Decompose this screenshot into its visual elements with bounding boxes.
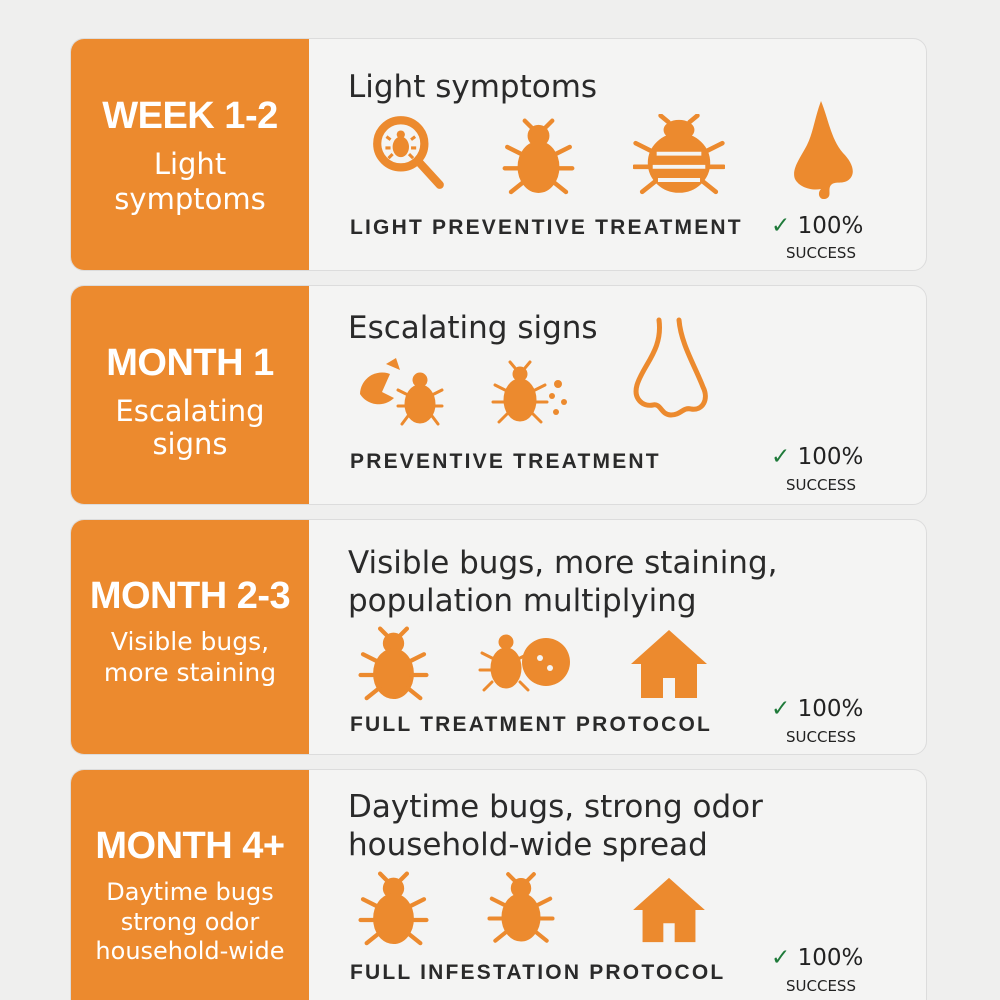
panel: month 1 label bbox=[71, 286, 309, 504]
heading: population multiplying bbox=[348, 583, 697, 619]
heading: Escalating signs bbox=[348, 310, 598, 346]
card: week 1-2 bbox=[70, 38, 927, 271]
label: LIGHT PREVENTIVE TREATMENT bbox=[350, 216, 743, 239]
success: ✓ 100% bbox=[771, 444, 863, 470]
success: ✓ 100% bbox=[771, 213, 863, 239]
icon: bug bbox=[502, 118, 574, 194]
panel: month 2-3 label: more staining bbox=[104, 658, 276, 687]
panel: month 4+ label: MONTH 4+ bbox=[95, 825, 285, 867]
card: month 4+: SUCCESS bbox=[786, 977, 856, 995]
panel: week 1-2 label bbox=[71, 39, 309, 270]
icon: eggs and bug bbox=[360, 358, 444, 426]
icon: house bbox=[631, 630, 707, 698]
heading bbox=[348, 545, 778, 619]
panel: month 4+ label: Daytime bugs bbox=[106, 878, 274, 906]
panel: month 1 label: Escalating bbox=[115, 394, 265, 428]
icon: striped bug bbox=[633, 114, 725, 194]
success: ✓ 100% bbox=[771, 945, 863, 971]
card: month 1 bbox=[70, 285, 927, 505]
card: month 1: SUCCESS bbox=[786, 476, 856, 494]
success: ✓ 100% bbox=[771, 696, 863, 722]
icon: bug with droppings bbox=[492, 360, 567, 424]
icon: bug bbox=[358, 626, 428, 700]
icon: bug 2 bbox=[488, 872, 554, 943]
label: FULL INFESTATION PROTOCOL bbox=[350, 961, 725, 984]
panel: week 1-2 label: symptoms bbox=[114, 182, 266, 216]
icon: bug bbox=[358, 872, 428, 946]
panel: month 2-3 label: MONTH 2-3 bbox=[90, 575, 290, 617]
panel: month 2-3 label: Visible bugs, bbox=[111, 627, 269, 656]
heading: Daytime bugs, strong odor bbox=[348, 789, 763, 825]
panel: week 1-2 label: Light bbox=[154, 147, 226, 181]
card: week 1-2: SUCCESS bbox=[786, 244, 856, 262]
heading: household-wide spread bbox=[348, 827, 708, 863]
heading: Visible bugs, more staining, bbox=[348, 545, 778, 581]
heading bbox=[348, 789, 763, 863]
panel: month 4+ label: household-wide bbox=[95, 937, 285, 965]
panel: month 4+ label: strong odor bbox=[121, 908, 259, 936]
panel: month 1 label: MONTH 1 bbox=[106, 342, 274, 384]
panel: month 1 label: signs bbox=[152, 427, 228, 461]
panel: week 1-2 label: WEEK 1-2 bbox=[102, 95, 278, 137]
label: FULL TREATMENT PROTOCOL bbox=[350, 713, 712, 736]
card: month 4+ bbox=[70, 769, 927, 1000]
panel: month 4+ label bbox=[71, 770, 309, 1000]
card: month 2-3 bbox=[70, 519, 927, 755]
icon: bug with stain bbox=[478, 634, 570, 692]
label: PREVENTIVE TREATMENT bbox=[350, 450, 661, 473]
card: month 2-3: SUCCESS bbox=[786, 728, 856, 746]
icon: magnifier bug bbox=[373, 116, 444, 189]
panel: month 2-3 label bbox=[71, 520, 309, 754]
icon: nose outline bbox=[634, 318, 708, 418]
icon: house bbox=[633, 878, 705, 942]
heading: Light symptoms bbox=[348, 69, 597, 105]
icon: nose bbox=[794, 101, 853, 199]
